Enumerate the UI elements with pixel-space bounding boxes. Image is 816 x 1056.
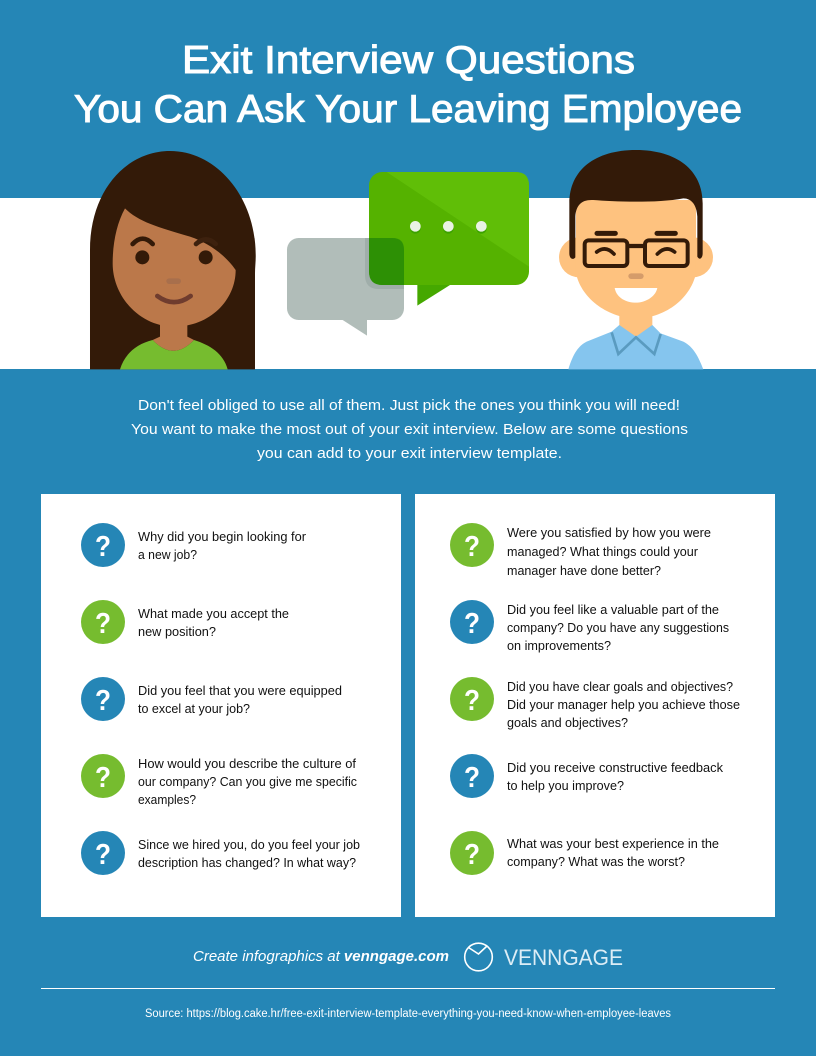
question 1 text: Why did you begin looking for: [138, 529, 307, 544]
icon: question 3: [81, 677, 125, 721]
question 5 text: Since we hired you, do you feel your job: [138, 837, 360, 852]
question 8 text: Did your manager help you achieve those: [507, 697, 740, 712]
intro text: Don't feel obliged to use all of them. Just pick the ones you think you will need!: [138, 397, 680, 414]
question 1 text: a new job?: [138, 547, 197, 562]
icon: question 8: ?: [464, 685, 480, 717]
question 10 text: What was your best experience in the: [507, 836, 719, 851]
intro text: You want to make the most out of your exit interview. Below are some questions: [131, 421, 688, 438]
question 7 text: [507, 602, 729, 653]
illustration: woman: [90, 151, 256, 369]
question 3 text: [138, 683, 342, 716]
icon: question 1: [81, 523, 125, 567]
question 5 text: description has changed? In what way?: [138, 855, 356, 870]
intro text: [131, 397, 688, 462]
question 1 text: [138, 529, 307, 562]
footer call to action: Create infographics at venngage.com: [193, 949, 449, 965]
question 5 text: [138, 837, 360, 870]
icon: question 4: [81, 754, 125, 798]
question 8 text: [507, 679, 740, 730]
icon: question 6: ?: [464, 531, 480, 563]
question 6 text: managed? What things could your: [507, 544, 699, 559]
panel: right questions: [415, 494, 775, 917]
icon: question 10: ?: [464, 839, 480, 871]
icon: question 9: [450, 754, 494, 798]
question 9 text: Did you receive constructive feedback: [507, 760, 723, 775]
panel: left questions: [41, 494, 401, 917]
icon: question 4: ?: [95, 762, 111, 794]
question 4 text: examples?: [138, 792, 196, 807]
question 6 text: [507, 525, 711, 578]
question 8 text: goals and objectives?: [507, 715, 628, 730]
question 2 text: [138, 606, 289, 639]
icon: question 3: ?: [95, 685, 111, 717]
question 4 text: [138, 756, 357, 807]
icon: question 10: [450, 831, 494, 875]
icon: question 2: [81, 600, 125, 644]
question 8 text: Did you have clear goals and objectives?: [507, 679, 733, 694]
icon: question 1: ?: [95, 531, 111, 563]
question 3 text: to excel at your job?: [138, 701, 250, 716]
icon: question 5: ?: [95, 839, 111, 871]
illustration: speech bubbles: [287, 172, 529, 336]
icon: question 7: ?: [464, 608, 480, 640]
source line: Source: https://blog.cake.hr/free-exit-interview-template-everything-you-need-know-when-employee-leaves: [145, 1008, 671, 1020]
icon: question 5: [81, 831, 125, 875]
question 10 text: [507, 836, 719, 869]
icon: venngage logo: [465, 943, 492, 971]
intro text: you can add to your exit interview template.: [257, 445, 562, 462]
icon: question 7: [450, 600, 494, 644]
question 9 text: [507, 760, 723, 793]
icon: question 9: ?: [464, 762, 480, 794]
icon: question 2: ?: [95, 608, 111, 640]
question 6 text: manager have done better?: [507, 563, 661, 578]
question 2 text: What made you accept the: [138, 606, 289, 621]
illustration: man: [559, 150, 713, 369]
icon: question 6: [450, 523, 494, 567]
question 9 text: to help you improve?: [507, 778, 624, 793]
title: [74, 39, 742, 131]
question 4 text: our company? Can you give me specific: [138, 774, 357, 789]
icon: question 8: [450, 677, 494, 721]
question 3 text: Did you feel that you were equipped: [138, 683, 342, 698]
question 2 text: new position?: [138, 624, 216, 639]
question 7 text: company? Do you have any suggestions: [507, 620, 729, 635]
venngage wordmark: VENNGAGE: [504, 945, 623, 970]
question 7 text: Did you feel like a valuable part of the: [507, 602, 719, 617]
question 6 text: Were you satisfied by how you were: [507, 525, 711, 540]
question 10 text: company? What was the worst?: [507, 854, 685, 869]
question 4 text: How would you describe the culture of: [138, 756, 356, 771]
white illustration band: [0, 198, 816, 369]
title: Exit Interview Questions: [182, 39, 635, 82]
question 7 text: on improvements?: [507, 638, 611, 653]
title: You Can Ask Your Leaving Employee: [74, 88, 742, 131]
